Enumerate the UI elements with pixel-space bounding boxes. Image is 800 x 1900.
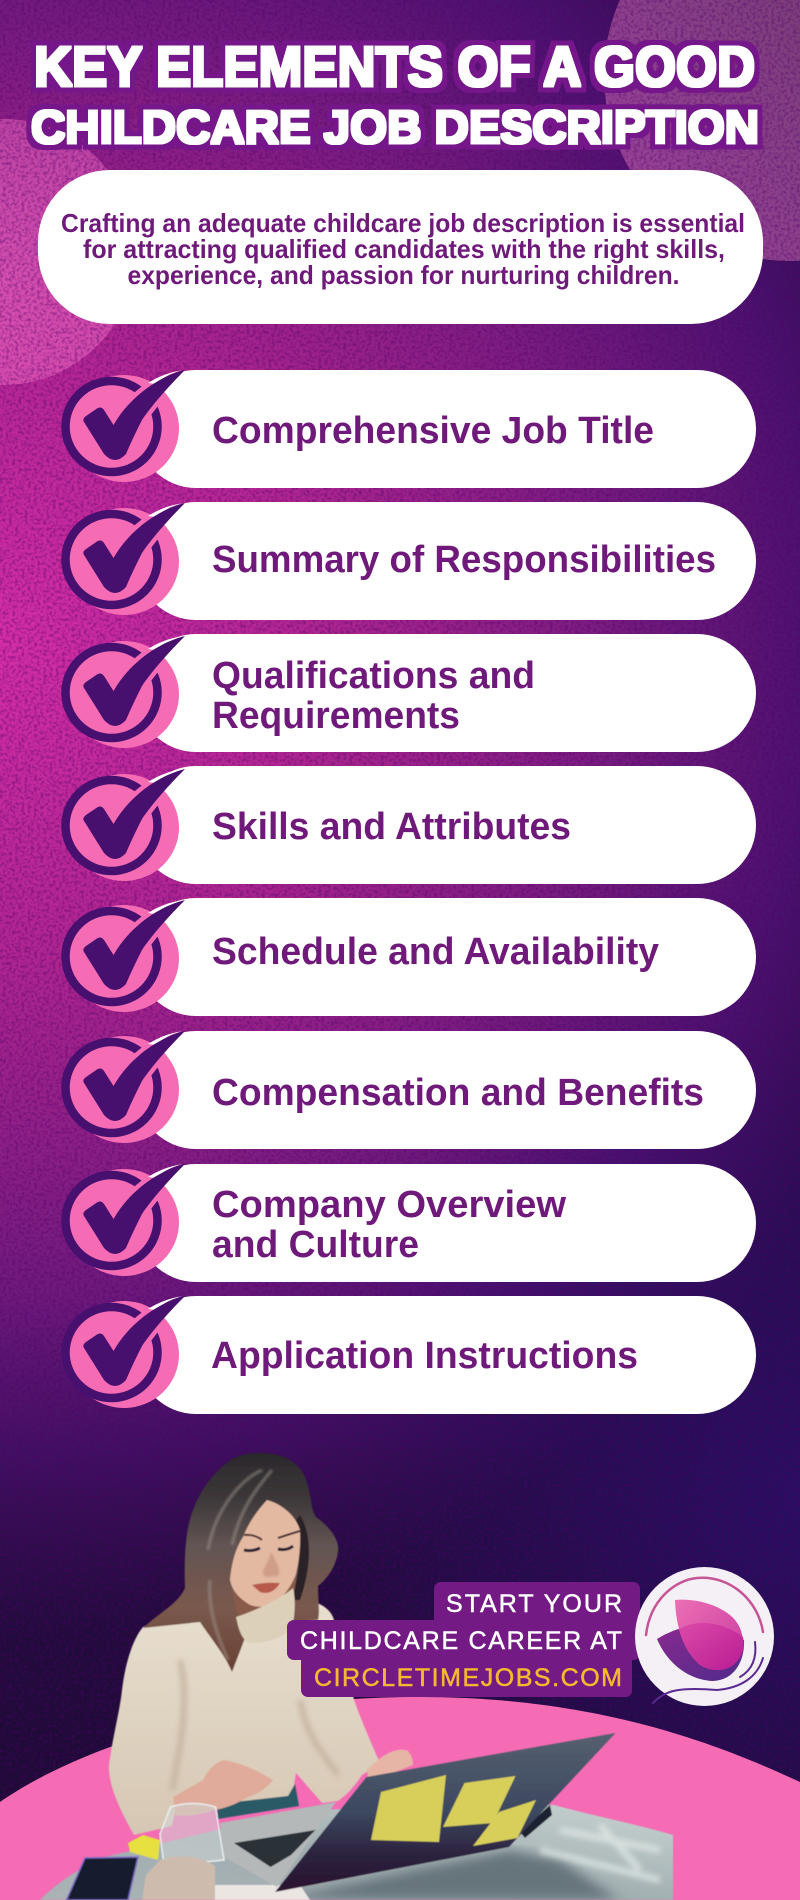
cta background [287,1582,640,1697]
item: Schedule and Availability [66,898,756,1016]
cta text [300,1590,622,1692]
keyboard [234,1830,316,1867]
intro text: experience, and passion for nurturing children. [128,260,680,290]
cta text: CIRCLETIMEJOBS.COM [314,1664,622,1692]
sweater [109,1600,380,1835]
item: Company Overview and Culture: and Culture [212,1224,419,1266]
intro text [61,208,745,290]
intro panel [38,170,763,324]
item: Summary of Responsibilities [66,502,756,620]
laptop base [220,1802,336,1887]
cta text: START YOUR [446,1590,622,1618]
face [230,1500,300,1607]
item: Skills and Attributes [66,766,756,884]
item: Application Instructions [66,1296,756,1414]
logo arcs [646,1578,763,1703]
item: Schedule and Availability: Schedule and Availability [212,931,659,973]
title: KEY ELEMENTS OF A GOOD [34,35,755,99]
title [31,35,759,153]
item: Qualifications and Requirements [66,634,756,752]
item: Company Overview and Culture [66,1164,756,1282]
logo [635,1567,774,1706]
jeans [217,1784,299,1819]
cta text: CHILDCARE CAREER AT [300,1627,622,1655]
eyes, nose and lips [244,1531,300,1593]
photo: woman at laptop [40,1453,680,1900]
sticky notes [371,1775,536,1846]
item: Comprehensive Job Title: Comprehensive Job Title [212,410,654,452]
item: Company Overview and Culture: Company Overview [212,1184,566,1226]
table [40,1800,680,1900]
item: Skills and Attributes: Skills and Attributes [212,806,571,848]
item: Summary of Responsibilities: Summary of Responsibilities [212,539,716,581]
item: Comprehensive Job Title [66,370,756,488]
item: Compensation and Benefits: Compensation and Benefits [212,1072,704,1114]
item: Application Instructions: Application Instructions [211,1335,638,1377]
yellow note on table [128,1835,160,1860]
hair shadow beside face [292,1515,309,1600]
call to action [287,1582,640,1697]
phone [66,1857,138,1900]
left hand [173,1760,273,1816]
intro text: Crafting an adequate childcare job description is essential [61,208,745,238]
hair [143,1453,338,1672]
right hand [367,1750,413,1778]
item: Compensation and Benefits [66,1031,756,1149]
title: CHILDCARE JOB DESCRIPTION [31,101,759,153]
intro text: for attracting qualified candidates with the right skills, [83,234,725,264]
laptop hinge edge [520,1805,552,1838]
turtleneck collar [236,1588,295,1643]
item: Qualifications and Requirements: Requirements [212,695,460,737]
logo petals [657,1626,744,1681]
pink semicircle backdrop [0,1697,800,1900]
neck [232,1575,296,1625]
cup [142,1856,215,1900]
laptop lid [275,1733,616,1892]
item: Qualifications and Requirements: Qualifications and [212,655,535,697]
glass [160,1804,224,1866]
